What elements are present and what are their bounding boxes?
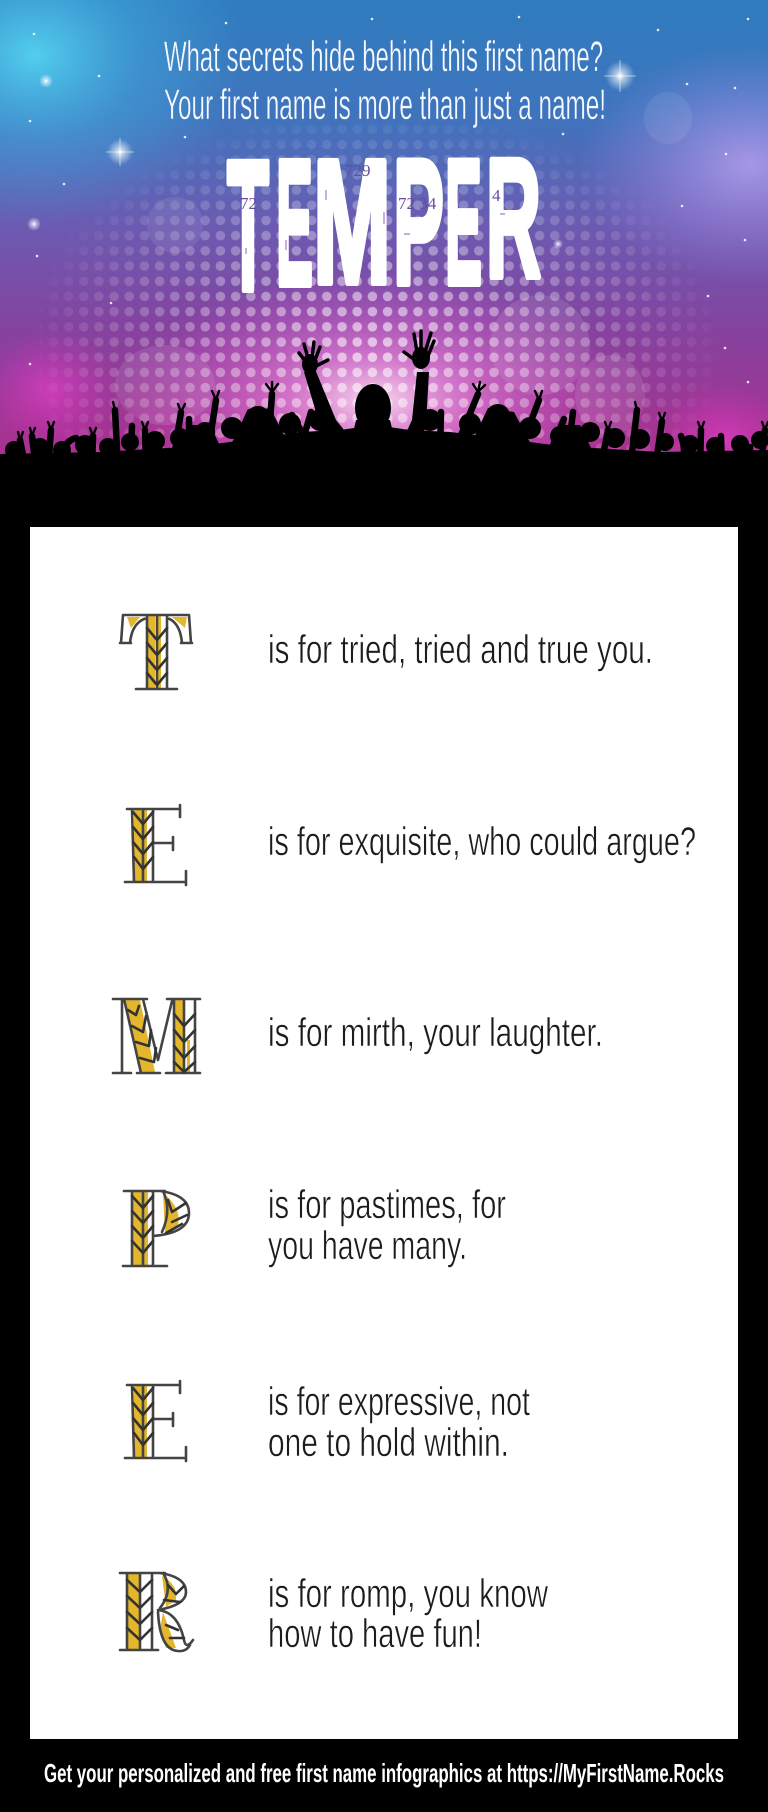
text: R lines — [268, 1572, 548, 1656]
row 4: P — [123, 1183, 506, 1268]
row 5: E — [125, 1380, 530, 1465]
name title: TEMPER: 72 34 — [398, 194, 437, 213]
text: E lines — [268, 1380, 530, 1465]
text: M line: is for mirth, your laughter. — [268, 1011, 603, 1055]
icon: wheat letter P — [123, 1191, 189, 1266]
white content panel — [30, 527, 738, 1739]
crowd silhouette — [0, 331, 768, 527]
text: P lines: you have many. — [268, 1224, 467, 1268]
name title: TEMPER: 729 — [345, 161, 370, 180]
name title: TEMPER: T — [227, 124, 269, 330]
header background: stage lights — [0, 0, 768, 530]
text: E lines: is for expressive, not — [268, 1380, 530, 1424]
name title: TEMPER — [227, 122, 541, 330]
text: R — [486, 124, 541, 312]
text: E lines: one to hold within. — [268, 1421, 509, 1465]
row 6: R — [120, 1572, 548, 1656]
headline text — [164, 33, 606, 129]
icon: wheat letter T — [120, 615, 192, 689]
icon: wheat letter E — [125, 805, 186, 885]
row 1: T — [120, 615, 653, 689]
icon: wheat letter E — [125, 1381, 186, 1461]
central figure with raised hands — [299, 331, 434, 470]
name title: TEMPER: E — [445, 122, 482, 322]
text: P lines: is for pastimes, for — [268, 1183, 506, 1227]
text: R lines: how to have fun! — [268, 1612, 482, 1656]
dot matrix light wall — [49, 124, 696, 452]
name title: TEMPER: E — [276, 122, 313, 322]
icon: wheat letter R — [120, 1573, 193, 1651]
text: P lines — [268, 1183, 506, 1268]
name title: TEMPER: M — [313, 124, 391, 320]
icon: wheat letter M — [113, 999, 200, 1073]
name title: TEMPER: P — [393, 122, 444, 322]
text: R lines: is for romp, you know — [268, 1572, 548, 1616]
row 3: M — [113, 999, 603, 1073]
name title: TEMPER: 4 — [492, 186, 501, 205]
name title: TEMPER: 72 — [240, 194, 257, 213]
row 2: E — [125, 805, 696, 885]
sparkles — [27, 16, 749, 383]
